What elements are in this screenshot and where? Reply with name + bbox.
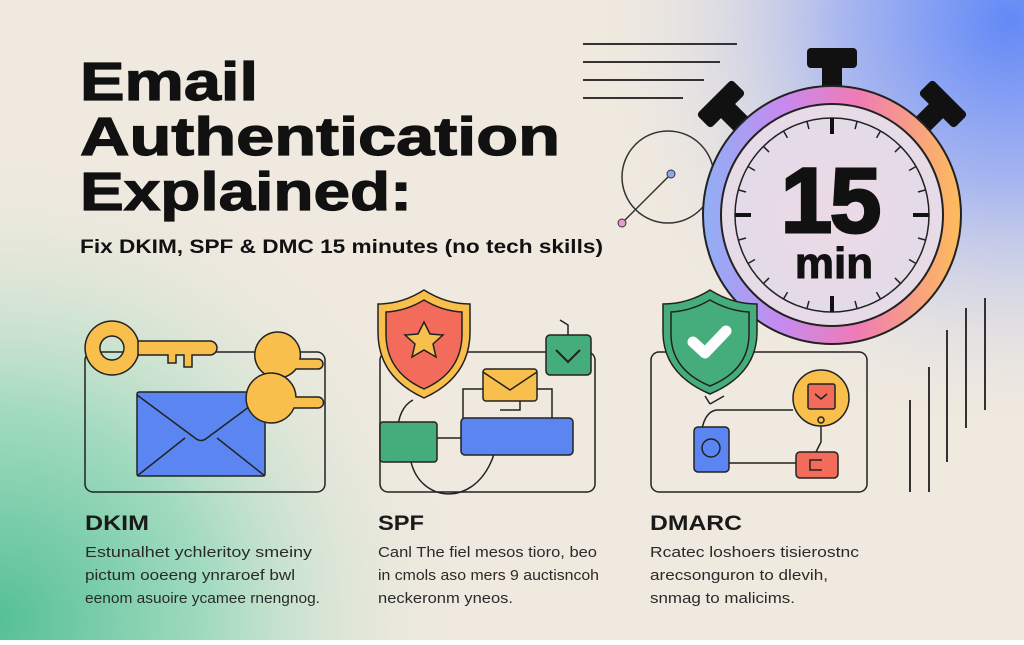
panel: DKIM illustration <box>85 321 325 492</box>
title: Email <box>80 52 258 112</box>
icon: envelope <box>137 392 265 476</box>
text block: DMARC: DMARC <box>650 512 742 535</box>
icon: key <box>85 321 217 375</box>
text block: DKIM: DKIM <box>85 512 149 535</box>
icon: red tag <box>796 452 838 478</box>
stopwatch: min <box>795 239 873 288</box>
text block: SPF <box>378 512 599 607</box>
decorative speed lines <box>583 44 737 98</box>
text block: DMARC: Rcatec loshoers tisierostnc <box>650 544 860 561</box>
icon: red shield star <box>378 290 470 398</box>
icon: blue bar <box>461 418 573 455</box>
text block: DKIM <box>85 512 320 607</box>
text block: SPF: neckeronm yneos. <box>378 590 513 607</box>
panel: DMARC illustration <box>651 290 867 492</box>
panel: SPF illustration <box>378 290 595 494</box>
vertical lines decoration <box>910 298 985 492</box>
icon: green shield check <box>663 290 757 394</box>
text block: DMARC <box>650 512 860 607</box>
text block: SPF: Canl The fiel mesos tioro, beo <box>378 544 597 561</box>
title: Explained: <box>80 162 412 222</box>
title: Authentication <box>80 107 560 167</box>
icon: green check box <box>546 335 591 375</box>
title <box>80 52 560 222</box>
text block: DMARC: arecsonguron to dlevih, <box>650 567 828 584</box>
text block: SPF: SPF <box>378 512 424 535</box>
icon: green rect <box>380 422 437 462</box>
icon: circle diagram <box>618 131 714 227</box>
stopwatch <box>696 48 968 344</box>
text block: DKIM: eenom asuoire ycamee rnengnog. <box>85 590 320 607</box>
icon: key blobs <box>246 332 324 423</box>
subtitle: Fix DKIM, SPF & DMC 15 minutes (no tech skills) <box>80 236 603 258</box>
icon: blue phone <box>694 427 729 472</box>
icon: yellow circle badge <box>793 370 849 426</box>
icon: mail <box>483 369 537 401</box>
stopwatch: 15 <box>781 150 879 252</box>
text block: SPF: in cmols aso mers 9 auctisncoh <box>378 567 599 584</box>
text block: DKIM: pictum ooeeng ynraroef bwl <box>85 567 295 584</box>
text block: DKIM: Estunalhet ychleritoy smeiny <box>85 544 313 561</box>
text block: DMARC: snmag to malicims. <box>650 590 795 607</box>
